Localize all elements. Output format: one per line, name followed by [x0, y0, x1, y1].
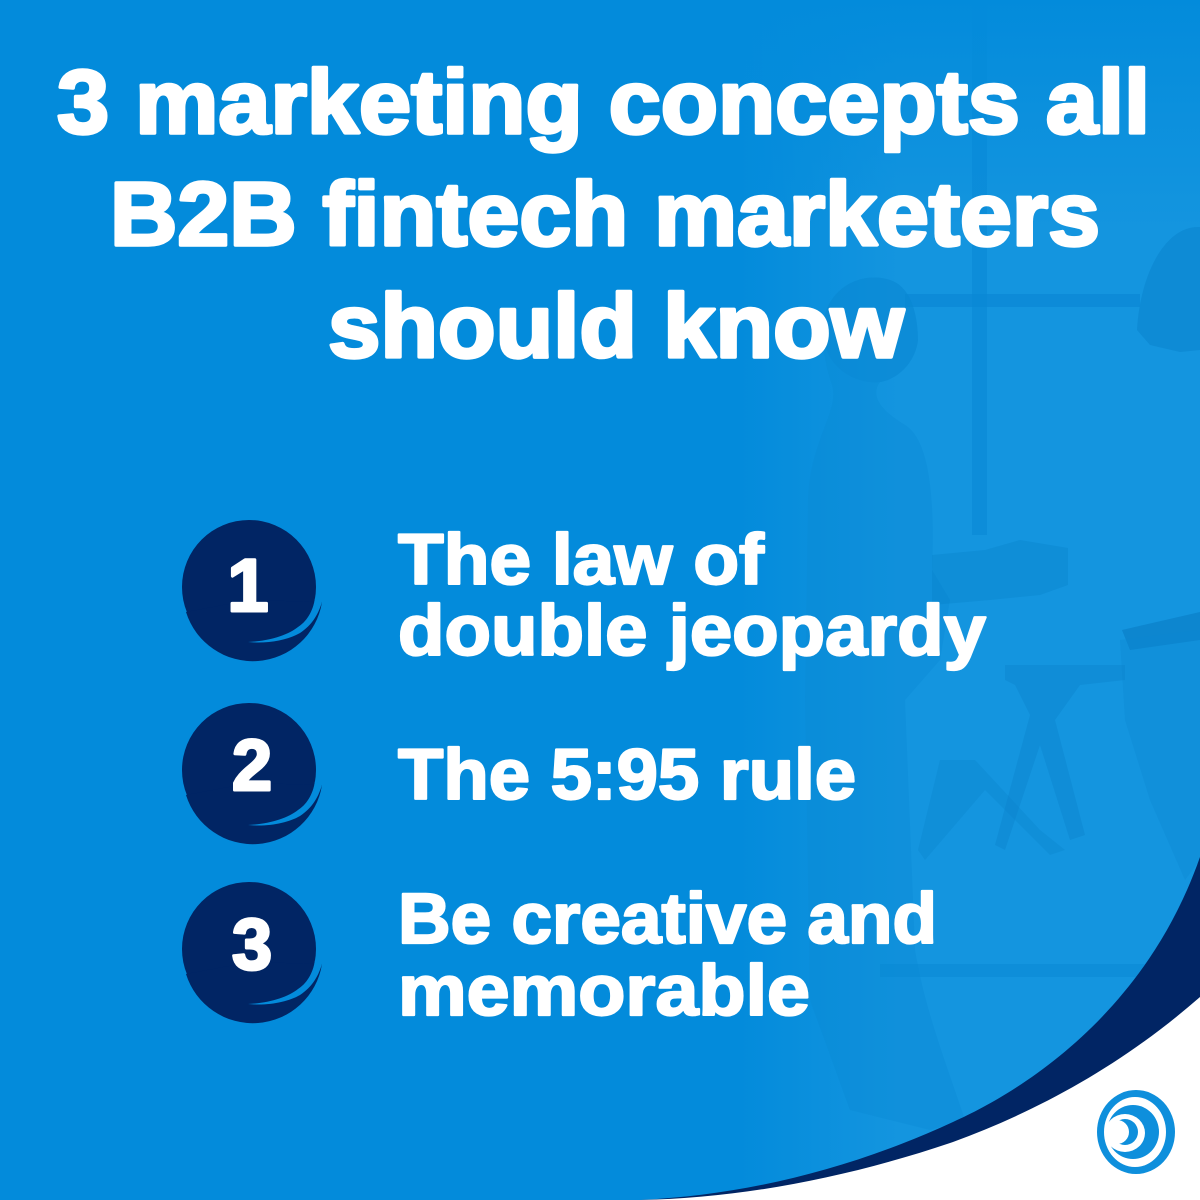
title: 3 marketing concepts all — [57, 53, 1150, 153]
badge 1: 1 — [227, 544, 269, 627]
badge 2: 2 — [232, 726, 272, 806]
item 3 label: memorable — [398, 952, 810, 1031]
item 3 label — [398, 880, 937, 1031]
badge 1 — [182, 520, 322, 661]
title: should know — [328, 277, 905, 377]
title: B2B fintech marketers — [110, 165, 1100, 265]
badge 3 — [182, 882, 322, 1023]
badge 3: 3 — [232, 905, 272, 985]
item 3 label: Be creative and — [398, 880, 937, 959]
icon: spiral logo — [1097, 1090, 1175, 1174]
item 2 label: The 5:95 rule — [398, 736, 856, 815]
navy swoosh — [640, 857, 1200, 1200]
white corner — [640, 997, 1200, 1200]
badge 2 — [182, 703, 322, 844]
item 1 label: The law of — [398, 521, 764, 600]
title — [57, 53, 1150, 377]
item 1 — [182, 520, 987, 671]
item 2 — [182, 703, 856, 844]
item 1 label — [398, 521, 987, 671]
faded office photo background — [740, 0, 1200, 1200]
item 3 — [182, 880, 937, 1031]
item 1 label: double jeopardy — [398, 592, 987, 671]
